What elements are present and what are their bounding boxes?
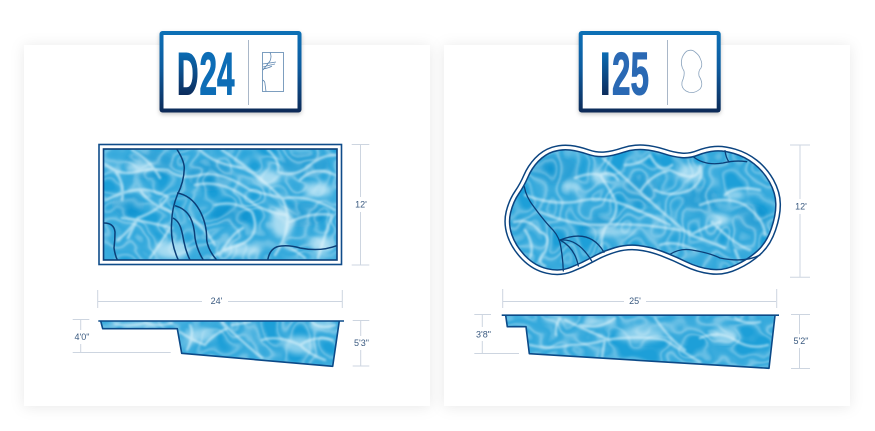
water texture: [505, 147, 779, 274]
pool section: D24: [98, 321, 344, 367]
badge: D24: [160, 31, 302, 112]
pool plan: I25: [505, 147, 779, 274]
dimension: I25 length 25': [503, 289, 777, 308]
dimension: D24 deep depth 5'3": 5'3": [354, 338, 369, 348]
pool plan: D24: [99, 144, 342, 264]
dimension: I25 deep depth 5'2": [791, 314, 810, 368]
pool section: I25: [502, 315, 779, 369]
water texture: [104, 149, 337, 260]
dimension: I25 deep depth 5'2": 5'2": [794, 336, 808, 346]
dimension: I25 width 12': [790, 145, 810, 277]
badge: I25: [579, 31, 721, 112]
panel: I25 card: [444, 45, 850, 406]
dimension: I25 length 25': 25': [629, 296, 641, 306]
dimension: D24 shallow depth 4'0": [73, 320, 171, 352]
dimension: I25 shallow depth 3'8": 3'8": [476, 330, 491, 340]
dimension: D24 width 12': [352, 144, 369, 265]
icon: D24 plan outline: [262, 52, 284, 92]
panel: D24 card: [24, 45, 430, 406]
icon: I25 plan outline: [681, 50, 702, 93]
dimension: I25 shallow depth 3'8": [474, 314, 519, 354]
water texture: [505, 315, 776, 369]
dimension: D24 width 12': 12': [355, 200, 367, 210]
model name D24: 24: [200, 40, 235, 107]
pool steps and benches: [524, 151, 760, 271]
dimension: D24 length 24': 24': [211, 296, 223, 306]
model name D24: D: [177, 40, 198, 107]
dimension: I25 width 12': 12': [795, 202, 807, 212]
model name I25: [600, 40, 649, 107]
dimension: D24 length 24': [98, 290, 342, 308]
water texture: [100, 321, 340, 367]
model name I25: 25: [612, 40, 649, 107]
model name I25: I: [600, 40, 611, 107]
dimension: D24 deep depth 5'3": [353, 320, 369, 366]
pool steps and benches: [104, 149, 337, 260]
dimension: D24 shallow depth 4'0": 4'0": [75, 332, 89, 342]
